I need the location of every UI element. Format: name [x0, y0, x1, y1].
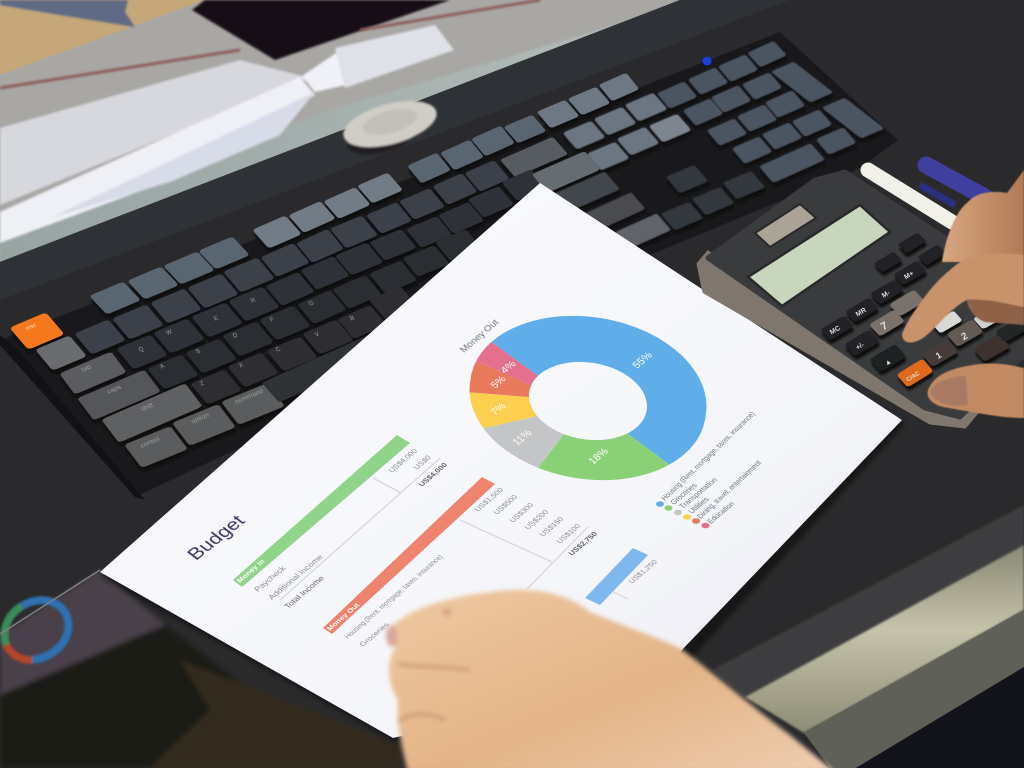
money in row labels: Additional Income [266, 553, 325, 601]
bottom modifier key row [124, 328, 402, 468]
calculator buttons [820, 232, 1024, 388]
keyboard key legends: D [231, 331, 239, 340]
paper drop shadow [100, 250, 905, 742]
chart title: Money Out [458, 317, 502, 355]
keyboard key legends: W [165, 328, 174, 337]
keyboard key legends: V [314, 330, 322, 339]
keyboard key legends: shift [140, 402, 155, 413]
keyboard key legends: S [195, 348, 202, 356]
red line on desk [0, 0, 540, 88]
calculator top face [708, 172, 1024, 417]
legend labels: Dining, travel, entertainment [695, 459, 763, 520]
keyboard rest band [0, 0, 790, 300]
calculator key labels: ▲ [884, 358, 893, 367]
donut slices [470, 316, 706, 480]
grey desk front [804, 610, 1024, 768]
money in row labels [252, 553, 327, 610]
money out label: Money Out [325, 601, 362, 632]
money out table lines [460, 520, 588, 589]
legend dots [656, 501, 710, 528]
money out values: US$200 [522, 508, 550, 531]
caps lock key row [77, 229, 481, 420]
keyboard key legends: R [249, 296, 257, 305]
right hand on calculator [902, 170, 1024, 418]
legend labels: Education [705, 500, 737, 525]
money out values: US$150 [537, 515, 565, 538]
budget paper [100, 183, 905, 742]
keyboard key legends: C [274, 345, 282, 354]
slice percentages: 18% [587, 447, 611, 467]
shift key row [101, 286, 417, 443]
beige desk edge [745, 545, 1024, 733]
calculator key labels: 1 [934, 350, 943, 361]
silver binder clip [0, 0, 135, 27]
calculator solar panel [755, 204, 816, 247]
keyboard body [0, 32, 898, 497]
dark floor bottom right [856, 667, 1024, 768]
keyboard key legends: option [190, 412, 211, 425]
escape key [9, 312, 64, 350]
calculator key labels: +/- [855, 341, 866, 352]
slice percentages: 5% [489, 374, 509, 391]
function key row [89, 73, 639, 314]
slice: education 4% [476, 342, 538, 386]
money out values: US$100 [554, 522, 582, 545]
left hand on paper [386, 590, 835, 768]
legend labels: Groceries [668, 481, 699, 506]
calculator key labels: M- [881, 289, 892, 300]
right keypad keys [657, 41, 884, 183]
calculator key labels: C/AC [906, 371, 922, 383]
money out section [323, 477, 599, 648]
ring logo [5, 600, 68, 660]
keyboard key legends: Z [199, 380, 206, 388]
wooden shelf corner [0, 0, 205, 75]
calculator key labels: MR [855, 307, 868, 318]
slice percentages: 55% [631, 351, 655, 371]
slice: utilities 7% [470, 392, 537, 428]
money out values: US$300 [507, 501, 535, 524]
screen edge highlight [0, 570, 100, 634]
savings header bar [585, 548, 648, 605]
keyboard key legends: F [269, 316, 276, 324]
money in values: US$4,000 [386, 447, 419, 474]
keyboard key legends: A [159, 362, 167, 371]
donut chart: Money Out [459, 316, 706, 480]
keyboard key legends: esc [25, 322, 39, 332]
tab key row [59, 151, 600, 394]
keyboard eraser knob [338, 92, 442, 161]
centre navigation keys [552, 93, 691, 249]
money out values [472, 486, 599, 557]
keyboard key legends: tab [80, 364, 93, 374]
legend labels: Utilities [686, 495, 711, 515]
money in section [233, 435, 449, 610]
keyboard keys [9, 41, 884, 468]
money in values: US$4,000 [416, 461, 449, 488]
upper finger [942, 170, 1024, 262]
savings table line [613, 592, 628, 599]
keyboard key legends: B [349, 315, 356, 323]
money in header bar [233, 435, 410, 587]
thumb [928, 363, 1024, 418]
slice percentages: 7% [489, 401, 509, 418]
savings section [585, 548, 659, 605]
thumb nail [930, 376, 968, 406]
lower left screen with ring logo [0, 570, 400, 768]
finger behind index [967, 300, 1024, 325]
keyboard side edge [0, 335, 145, 500]
slice: groceries 18% [538, 433, 670, 480]
money in values [386, 447, 449, 488]
money out row labels: Groceries [357, 621, 391, 648]
title: Budget: Budget [184, 512, 250, 564]
keyboard key legends: E [213, 315, 220, 323]
calculator key labels: 2 [960, 330, 970, 343]
money out values: US$2,750 [566, 530, 599, 557]
indicator blue dot [702, 56, 712, 66]
money in table lines [280, 458, 440, 600]
slice: transportation 11% [484, 416, 564, 468]
calculator shell edge [698, 252, 1000, 427]
calculator key labels: 7 [879, 320, 890, 333]
calculator key labels [829, 270, 970, 383]
money out values: US$500 [491, 493, 519, 516]
legend labels: Transportation [677, 476, 719, 510]
slice percentages: 11% [511, 428, 535, 448]
mat stitching strip [712, 505, 1024, 697]
money out values: US$1,500 [472, 486, 505, 513]
blue pen [920, 165, 985, 205]
slice percentages [489, 351, 655, 467]
calculator display [748, 205, 890, 306]
savings value: US$1,250 [626, 558, 659, 585]
money in row labels: Paycheck [252, 564, 288, 593]
keyboard key legends: caps [106, 384, 123, 395]
legend labels: Housing (Rent, mortgage, taxes, insurance) [659, 410, 757, 502]
money out header bar [323, 477, 495, 634]
calculator [698, 172, 1024, 427]
keyboard key legends: command [234, 388, 265, 406]
money in values: US$0 [411, 454, 433, 471]
money in row labels: Total Income [282, 574, 327, 610]
dark object at top [192, 0, 450, 60]
keyboard key legends: G [307, 300, 315, 308]
paper sheet [100, 183, 902, 738]
slice percentages: 4% [499, 359, 519, 376]
keyboard key legends: X [238, 361, 246, 370]
donut legend [656, 410, 763, 528]
slice: housing 55% [492, 316, 706, 465]
money out row labels: Housing (Rent, mortgage, taxes, insurance) [344, 554, 445, 640]
keyboard key legends: control [139, 436, 162, 450]
stack of loose papers [0, 25, 454, 243]
keyboard key legends [25, 296, 356, 450]
white pen [868, 170, 952, 222]
money in label: Money In [235, 558, 267, 584]
calculator key labels: MC [829, 325, 842, 336]
calculator key labels: M+ [903, 270, 915, 281]
arrow keys [661, 165, 765, 230]
keyboard key legends: Q [137, 346, 145, 354]
number key row [35, 137, 568, 371]
slice: dining 5% [470, 360, 532, 397]
index finger [902, 254, 1024, 343]
